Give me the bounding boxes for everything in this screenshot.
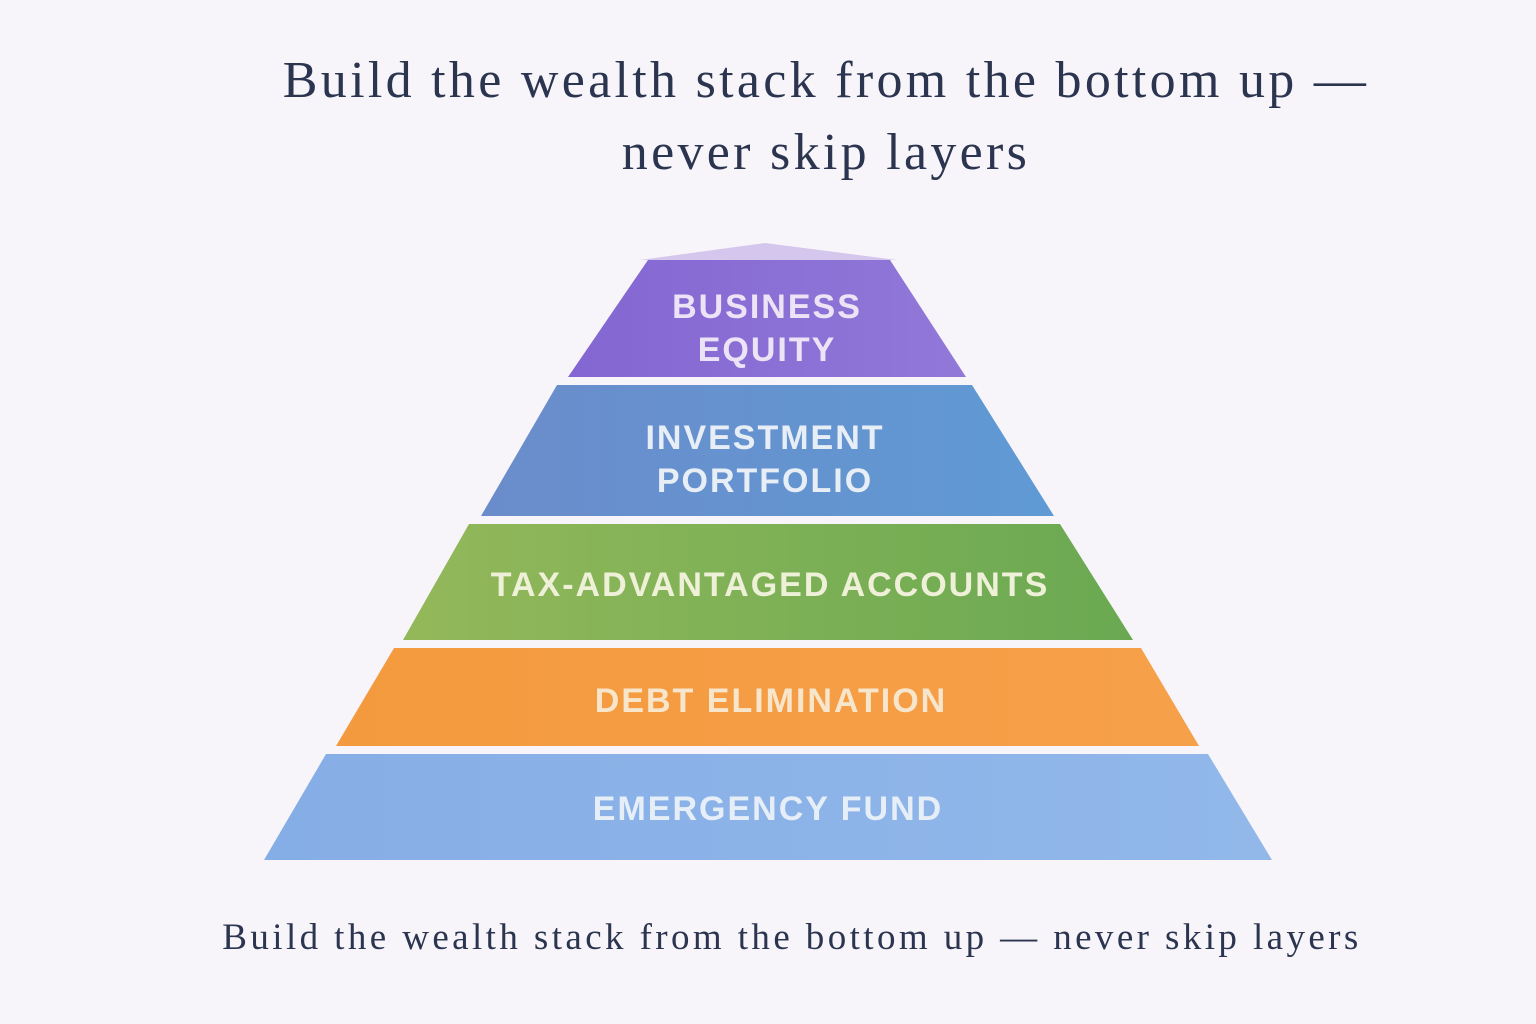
title: Build the wealth stack from the bottom up — [283, 52, 1369, 109]
layer: business equity: BUSINESS [672, 288, 862, 326]
layer: investment portfolio: PORTFOLIO [657, 462, 873, 500]
layer: emergency fund [264, 754, 1272, 860]
layer: tax-advantaged accounts: TAX-ADVANTAGED ACCOUNTS [491, 566, 1049, 604]
layer: tax-advantaged accounts [403, 524, 1133, 640]
layer: investment portfolio [481, 385, 1054, 516]
layer: emergency fund: EMERGENCY FUND [593, 790, 943, 828]
title [283, 52, 1369, 181]
layer: debt elimination [336, 648, 1199, 746]
layer: debt elimination: DEBT ELIMINATION [595, 682, 947, 720]
title: never skip layers [622, 124, 1030, 181]
cap [640, 243, 897, 260]
caption: Build the wealth stack from the bottom up — never skip layers [222, 917, 1362, 958]
layer: business equity: EQUITY [698, 331, 836, 369]
layer: business equity [568, 260, 966, 377]
layer: investment portfolio: INVESTMENT [645, 419, 885, 457]
